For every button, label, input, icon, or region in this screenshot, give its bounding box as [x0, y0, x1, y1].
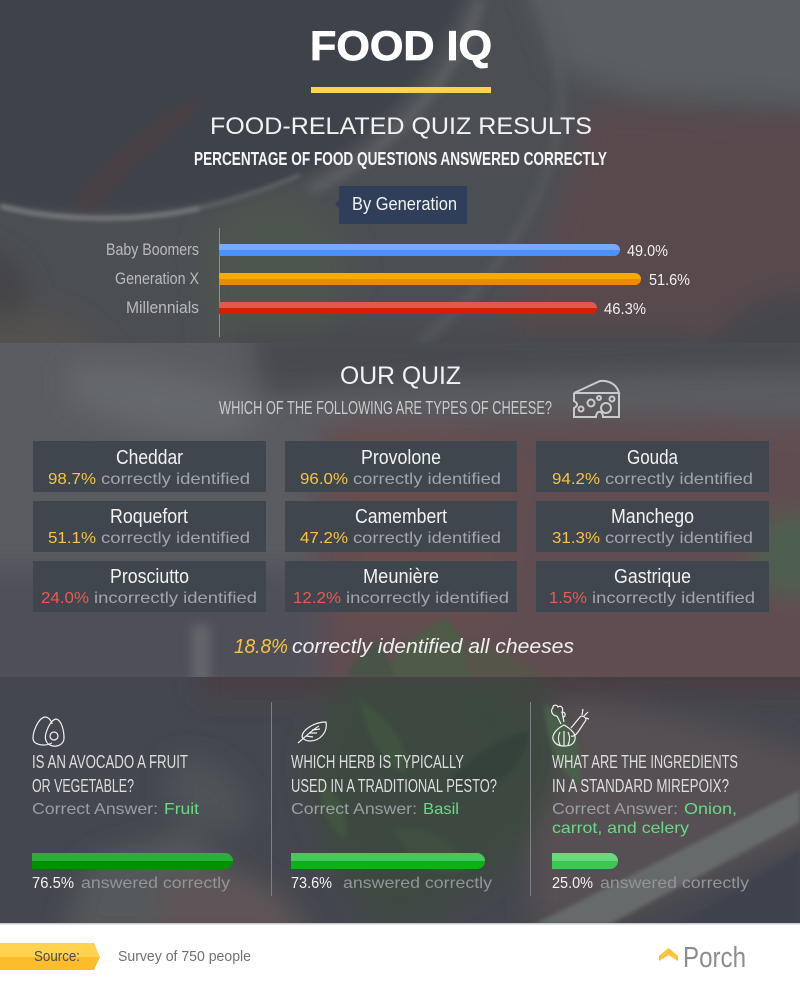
card: Provolone [285, 441, 517, 492]
card: Roquefort: 51.1% [48, 530, 96, 547]
icon: avocado [33, 717, 64, 746]
title underline [311, 87, 491, 93]
section: generation results [106, 22, 690, 337]
card: Gastrique [536, 561, 769, 612]
panel: pesto question: answered correctly [343, 875, 492, 892]
panel: mirepoix question [552, 705, 749, 892]
card: Manchego: Manchego [611, 506, 694, 528]
card: Manchego [536, 501, 769, 552]
panel: avocado question: Fruit [164, 801, 200, 818]
bar: Baby Boomers [106, 240, 668, 260]
logo: Porch: Porch [683, 942, 746, 974]
panel: pesto question: 73.6% [291, 875, 332, 892]
card: Meunière: Meunière [363, 566, 439, 588]
card: Manchego: correctly identified [605, 530, 753, 547]
card: Gastrique: Gastrique [614, 566, 691, 588]
panel: mirepoix question: Onion, [684, 801, 737, 818]
card: Gouda: correctly identified [605, 471, 753, 488]
bar: Generation X: 51.6% [649, 272, 690, 289]
panel: avocado question [32, 717, 233, 892]
card: Meunière: incorrectly identified [346, 590, 509, 607]
quiz heading: OUR QUIZ [340, 362, 461, 390]
icon: basil leaf [298, 722, 326, 743]
card: Gastrique: 1.5% [549, 590, 587, 607]
card: Gouda [536, 441, 769, 492]
card: Meunière [285, 561, 517, 612]
title: FOOD IQ [310, 22, 492, 69]
card: Gouda: 94.2% [552, 471, 600, 488]
source tag [0, 943, 100, 970]
background: kitchen photo middle [0, 330, 800, 700]
subheading: PERCENTAGE OF FOOD QUESTIONS ANSWERED CORRECTLY [194, 149, 607, 169]
bar: pesto [291, 853, 485, 869]
card: Camembert: Camembert [355, 506, 447, 528]
panel: mirepoix question: 25.0% [552, 875, 593, 892]
panel: avocado question: OR VEGETABLE? [32, 776, 134, 796]
panel: pesto question: Basil [423, 801, 459, 818]
panel: avocado question: IS AN AVOCADO A FRUIT [32, 752, 188, 772]
bar: Millennials: 46.3% [604, 301, 646, 318]
footer [0, 923, 800, 987]
quiz question: WHICH OF THE FOLLOWING ARE TYPES OF CHEESE? [219, 398, 552, 418]
card: Provolone: Provolone [361, 447, 441, 469]
card: Manchego: 31.3% [552, 530, 600, 547]
callout: all cheeses: correctly identified all cheeses [292, 636, 574, 658]
card: Cheddar: Cheddar [116, 447, 183, 469]
section: food questions [32, 702, 749, 896]
panel: avocado question: Correct Answer: [32, 801, 158, 818]
card: Cheddar [33, 441, 266, 492]
card: Provolone: correctly identified [353, 471, 501, 488]
card: Prosciutto: Prosciutto [110, 566, 189, 588]
heading: FOOD-RELATED QUIZ RESULTS [210, 113, 592, 140]
card: Gouda: Gouda [627, 447, 679, 469]
card: Prosciutto: incorrectly identified [94, 590, 257, 607]
card: Cheddar: 98.7% [48, 471, 96, 488]
source text: Survey of 750 people [118, 948, 251, 965]
icon: cheese [574, 381, 619, 417]
source tag: Source: [34, 948, 80, 965]
panel: mirepoix question: answered correctly [600, 875, 749, 892]
background: salad photo bottom [0, 677, 800, 923]
background: kitchen photo top [0, 0, 800, 370]
bar: Generation X [115, 269, 690, 289]
panel: pesto question: USED IN A TRADITIONAL PESTO? [291, 776, 497, 796]
card: Meunière: 12.2% [293, 590, 341, 607]
bar: mirepoix [552, 853, 618, 869]
card: Prosciutto: 24.0% [41, 590, 89, 607]
bar chart: generations [106, 228, 690, 337]
section: our quiz [33, 362, 769, 658]
card: Roquefort: Roquefort [110, 506, 188, 528]
bar: avocado [32, 853, 233, 869]
bar: Millennials: Millennials [126, 298, 199, 317]
panel: mirepoix question: Correct Answer: [552, 801, 678, 818]
bar: Baby Boomers: Baby Boomers [106, 240, 199, 259]
card: Camembert: correctly identified [353, 530, 501, 547]
bar: Generation X: Generation X [115, 269, 199, 288]
card: Provolone: 96.0% [300, 471, 348, 488]
card: Camembert [285, 501, 517, 552]
card: Cheddar: correctly identified [101, 471, 250, 488]
panel: pesto question [291, 722, 497, 892]
card: Roquefort: correctly identified [101, 530, 250, 547]
panel: avocado question: 76.5% [32, 875, 74, 892]
generation tab: By Generation [352, 194, 457, 214]
panel: pesto question: Correct Answer: [291, 801, 417, 818]
card: Prosciutto [33, 561, 266, 612]
card: Gastrique: incorrectly identified [592, 590, 755, 607]
panel: mirepoix question: IN A STANDARD MIREPOIX? [552, 776, 729, 796]
icon: vegetables [552, 705, 589, 746]
panel: avocado question: answered correctly [81, 875, 230, 892]
callout: all cheeses: 18.8% [234, 636, 288, 658]
panel: mirepoix question: carrot, and celery [552, 820, 689, 837]
card: Camembert: 47.2% [300, 530, 348, 547]
bar: Baby Boomers: 49.0% [627, 243, 668, 260]
bar: Millennials [126, 298, 646, 318]
card: Roquefort [33, 501, 266, 552]
panel: pesto question: WHICH HERB IS TYPICALLY [291, 752, 464, 772]
generation tab [335, 186, 467, 224]
logo: Porch [659, 942, 746, 974]
